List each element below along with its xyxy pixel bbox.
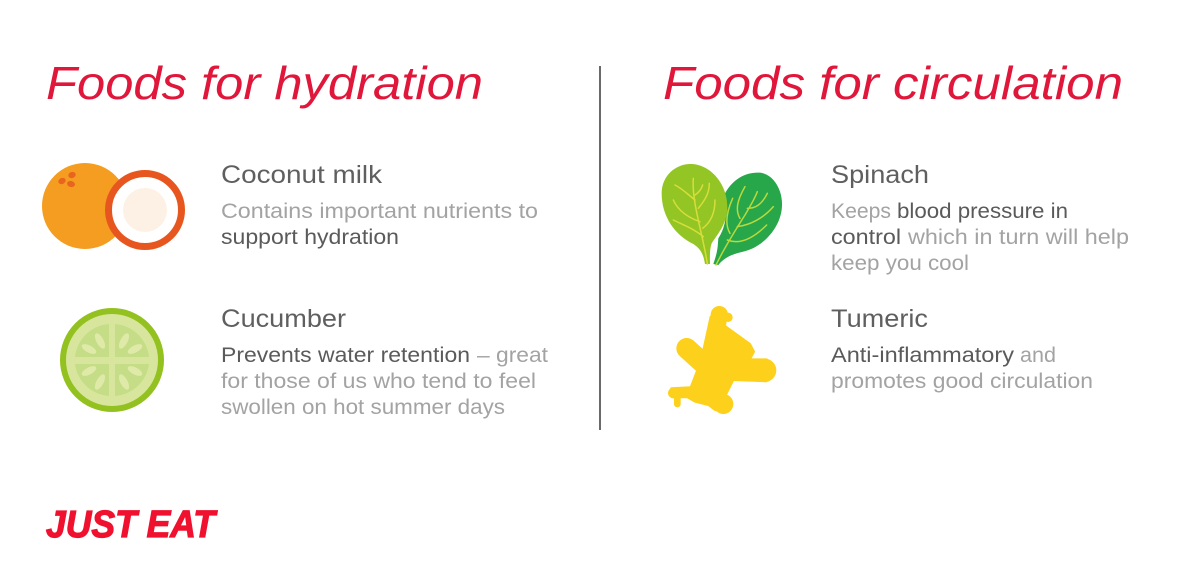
text block: spinach	[831, 161, 1129, 275]
text block: coconut milk: support hydration	[221, 226, 399, 249]
text block: coconut milk: Contains important nutrients to	[221, 200, 538, 223]
text block: spinach: blood pressure in	[897, 200, 1068, 223]
text block: spinach: Spinach	[831, 161, 929, 189]
text block: cucumber: for those of us who tend to feel	[221, 370, 536, 393]
icon: spinach leaves	[662, 164, 782, 265]
text block: cucumber	[221, 305, 548, 419]
logo: Just Eat: JUST EAT	[46, 504, 218, 546]
heading: Foods for hydration: Foods for hydration	[46, 57, 483, 109]
text block: spinach: which in turn will help	[907, 226, 1129, 249]
text block: coconut milk: Coconut milk	[221, 161, 383, 189]
text block: spinach: keep you cool	[831, 252, 969, 275]
icon: coconut	[42, 163, 182, 249]
text block: cucumber: – great	[477, 344, 548, 367]
vertical divider	[599, 66, 601, 430]
text block: cucumber: Prevents water retention	[221, 344, 470, 367]
heading: Foods for circulation: Foods for circulation	[663, 57, 1123, 109]
text block: cucumber: swollen on hot summer days	[221, 396, 505, 419]
text block: coconut milk	[221, 161, 538, 249]
icon: turmeric root	[668, 306, 776, 414]
text block: tumeric	[831, 305, 1093, 393]
text block: tumeric: Anti-inflammatory	[831, 344, 1015, 367]
text block: cucumber: Cucumber	[221, 305, 346, 333]
text block: spinach: Keeps	[831, 200, 891, 223]
text block: tumeric: and	[1020, 344, 1056, 367]
text block: spinach: control	[831, 226, 901, 249]
icon: cucumber slice	[60, 308, 164, 412]
text block: tumeric: Tumeric	[831, 305, 928, 333]
text block: tumeric: promotes good circulation	[831, 370, 1093, 393]
